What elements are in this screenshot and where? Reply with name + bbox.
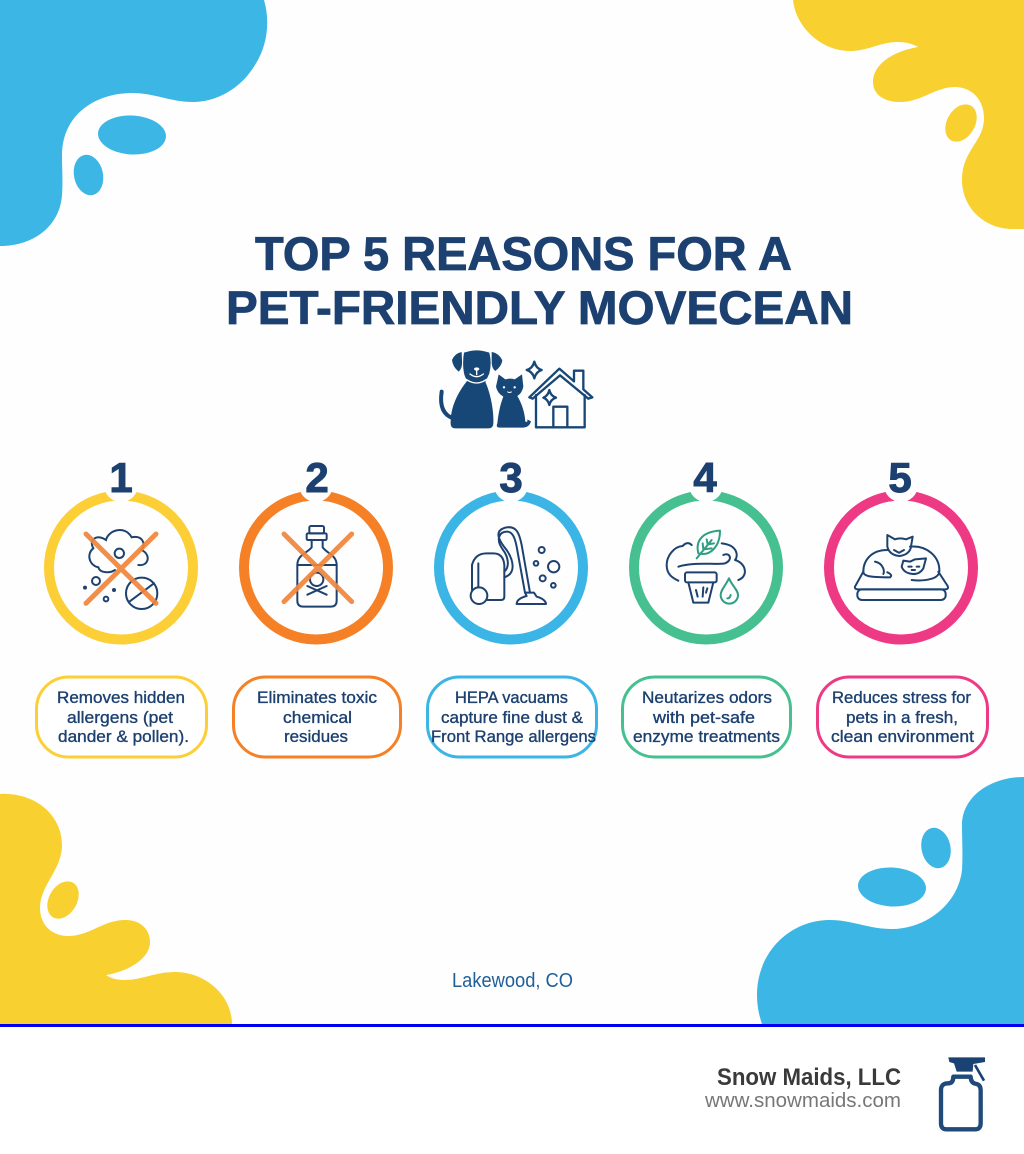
number 1: 1 <box>109 454 133 501</box>
number 3: 3 <box>499 454 523 501</box>
title: TOP 5 REASONS FOR A <box>255 227 792 280</box>
text 5 <box>831 689 974 746</box>
icon: leaf, pot and drop <box>667 531 745 604</box>
number 5: 5 <box>888 454 912 501</box>
text 3: HEPA vacuams <box>455 689 568 707</box>
text 4: with pet-safe <box>652 709 755 727</box>
pill 1 <box>36 677 206 757</box>
item 1: allergens <box>36 454 206 757</box>
ring 2 <box>244 496 388 640</box>
ring 3 <box>439 496 583 640</box>
item 4: odors <box>622 454 790 757</box>
icon: spray bottle <box>941 1057 985 1129</box>
location text: Lakewood, CO <box>452 970 573 992</box>
title <box>226 227 853 334</box>
text 2: Eliminates toxic <box>257 689 377 707</box>
icon: vacuum <box>471 527 559 604</box>
icon: allergens crossed out <box>83 530 157 609</box>
blob: bottom left yellow <box>0 794 232 1024</box>
footer band <box>0 1024 1024 1154</box>
text 3 <box>431 689 596 746</box>
item 3: HEPA vacuum <box>428 454 596 757</box>
blob: bottom right blue <box>757 777 1024 1024</box>
text 2: chemical <box>283 709 352 727</box>
blob: top left blue <box>0 0 267 246</box>
text 2 <box>257 689 377 746</box>
text 5: pets in a fresh, <box>846 709 958 727</box>
text 1: Removes hidden <box>57 689 185 707</box>
pill 3 <box>428 677 596 757</box>
text 3: Front Range allergens <box>431 728 596 746</box>
ring 5 <box>829 496 973 640</box>
text 2: residues <box>284 728 348 746</box>
icon: toxic bottle crossed out <box>284 526 352 607</box>
footer url: www.snowmaids.com <box>704 1090 901 1112</box>
pill 2 <box>234 677 400 757</box>
number 2: 2 <box>305 454 329 501</box>
icon: dog, cat and house <box>441 350 592 428</box>
text 4: Neutarizes odors <box>642 689 772 707</box>
item 5: pet stress <box>818 454 988 757</box>
text 4 <box>633 689 780 746</box>
item 2: toxic residues <box>234 454 400 757</box>
text 1: allergens (pet <box>67 709 173 727</box>
footer company name: Snow Maids, LLC <box>717 1064 901 1091</box>
icon: cats on bed <box>855 535 948 600</box>
pill 5 <box>818 677 988 757</box>
text 5: Reduces stress for <box>832 689 971 707</box>
text 1: dander & pollen). <box>58 728 189 746</box>
text 4: enzyme treatments <box>633 728 780 746</box>
title: PET-FRIENDLY MOVECEAN <box>226 281 853 334</box>
text 3: capture fine dust & <box>441 709 583 727</box>
number 4: 4 <box>693 454 717 501</box>
text 5: clean environment <box>831 728 974 746</box>
ring 1 <box>49 496 193 640</box>
pill 4 <box>622 677 790 757</box>
text 1 <box>57 689 189 746</box>
blob: top right yellow <box>793 0 1024 229</box>
ring 4 <box>634 496 778 640</box>
